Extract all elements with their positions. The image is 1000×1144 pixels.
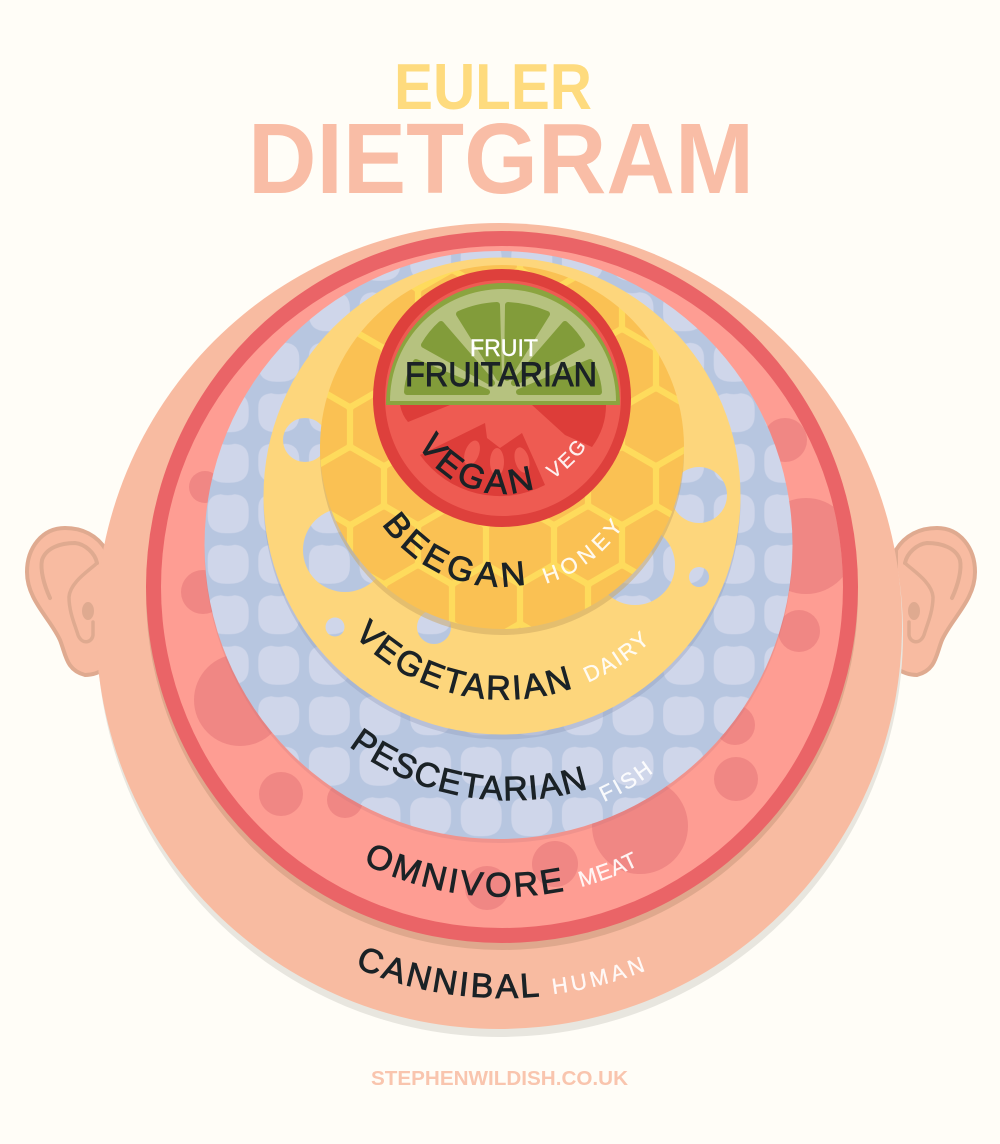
label: vegan: VEGAN	[422, 430, 533, 494]
label: dairy: DAIRY	[583, 630, 646, 682]
panel: vegan tomato rim	[373, 269, 631, 527]
lime segments	[407, 305, 599, 392]
label: veg: VEG	[544, 440, 584, 476]
title	[248, 50, 754, 215]
label: pescetarian: PESCETARIAN	[350, 728, 586, 801]
cheese holes	[283, 418, 727, 644]
label: fruitarian: FRUITARIAN	[405, 356, 597, 394]
title line: Euler: EULER	[394, 50, 592, 123]
label: fish: FISH	[598, 761, 652, 802]
footer credit: STEPHENWILDISH.CO.UK	[371, 1068, 629, 1090]
title line: Dietgram: DIETGRAM	[248, 103, 754, 215]
label: beegan: BEEGAN	[382, 511, 524, 588]
label: vegetarian: VEGETARIAN	[360, 618, 571, 700]
icon: left ear	[27, 528, 106, 675]
tomato seeds pattern	[400, 405, 606, 496]
panel: beegan honeycomb	[320, 265, 684, 629]
label: omnivore: OMNIVORE	[367, 845, 564, 898]
shadow under head	[97, 231, 903, 1037]
label: cannibal: CANNIBAL	[359, 948, 540, 998]
meat blotches	[181, 418, 854, 910]
shadow under meat ring	[146, 238, 858, 950]
lime pith	[390, 289, 616, 401]
label: fruit: FRUIT	[470, 335, 538, 362]
label: human: HUMAN	[552, 956, 644, 994]
head diagram	[25, 223, 977, 1037]
panel: omnivore outer ring	[146, 231, 858, 943]
shadow under fish circle	[204, 255, 792, 843]
panel: vegetarian cheese	[264, 258, 740, 734]
shadow under dairy circle	[264, 262, 740, 740]
tomato flesh	[385, 280, 621, 516]
panel: cannibal ring	[96, 223, 902, 1029]
panel: pescetarian fish scales	[204, 251, 792, 839]
label: meat: MEAT	[578, 852, 634, 887]
icon: right ear	[896, 528, 975, 675]
panel: fruitarian lime rim	[386, 283, 620, 405]
panel: omnivore meat	[161, 246, 843, 928]
shadow under honey circle	[320, 271, 684, 635]
label: honey: HONEY	[542, 518, 620, 584]
